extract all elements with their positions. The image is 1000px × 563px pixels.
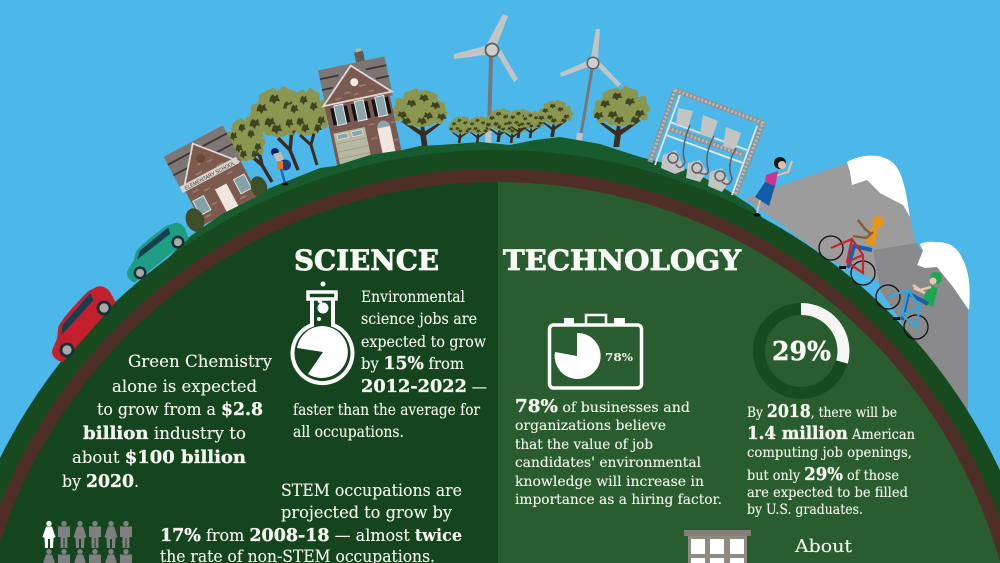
icon: flask with pie bbox=[292, 282, 352, 383]
text: environmental science jobs bbox=[293, 288, 487, 441]
text: green chemistry: Green Chemistry bbox=[128, 352, 273, 371]
text: environmental science jobs: by 15% from bbox=[361, 353, 464, 374]
hydro generators in truss frame bbox=[650, 90, 763, 195]
text: computing job openings: computing job openings, bbox=[747, 445, 912, 461]
tall house with garage bbox=[313, 44, 405, 167]
hill ground bbox=[130, 137, 790, 300]
text: 78% of businesses: that the value of job bbox=[515, 437, 653, 453]
icon grid: one in six people bbox=[42, 521, 132, 563]
bushes bbox=[182, 174, 270, 234]
text: computing job openings: are expected to be filled bbox=[747, 485, 908, 501]
text: 78% of businesses: candidates' environmental bbox=[515, 455, 702, 471]
cyclist: red bike bbox=[819, 216, 884, 285]
text: environmental science jobs: 2012-2022 — bbox=[361, 376, 487, 397]
globe: two-tone interior bbox=[0, 150, 1000, 563]
cyclist: blue bike bbox=[876, 272, 942, 339]
text: STEM occupations: 17% from 2008-18 — almost twice bbox=[160, 525, 462, 546]
text: green chemistry: to grow from a $2.8 bbox=[97, 399, 263, 420]
donut chart: 29% bbox=[759, 309, 843, 393]
heading: science: SCIENCE bbox=[294, 244, 439, 277]
teal car bbox=[118, 217, 193, 286]
heading: technology: TECHNOLOGY bbox=[503, 244, 742, 277]
text: environmental science jobs: science jobs are bbox=[361, 310, 477, 328]
icon: office building bbox=[684, 530, 751, 563]
text: 78% of businesses bbox=[515, 396, 722, 508]
text: 78% of businesses: 78% of businesses and bbox=[515, 396, 690, 417]
woman on hill bbox=[754, 157, 792, 217]
icon: wind turbine left bbox=[454, 14, 518, 147]
text: 78% of businesses: knowledge will increase in bbox=[515, 474, 704, 490]
globe: outer green band bbox=[0, 150, 1000, 563]
globe: brown soil band bbox=[0, 169, 1000, 563]
text: green chemistry: by 2020. bbox=[62, 471, 139, 492]
text: environmental science jobs: all occupations. bbox=[293, 423, 404, 441]
text: green chemistry bbox=[62, 352, 273, 492]
text: computing job openings bbox=[747, 401, 915, 518]
text: green chemistry: billion industry to bbox=[83, 423, 246, 444]
child with backpack bbox=[271, 148, 291, 186]
text: computing job openings: but only 29% of those bbox=[747, 464, 899, 485]
text: STEM occupations: projected to grow by bbox=[281, 503, 453, 522]
text: STEM occupations bbox=[160, 481, 462, 563]
red car bbox=[40, 280, 121, 366]
icon: briefcase with 78% pie bbox=[550, 315, 642, 388]
text: environmental science jobs: faster than the average for bbox=[293, 401, 481, 419]
snowy mountains bbox=[745, 156, 970, 420]
text: STEM occupations: STEM occupations are bbox=[281, 481, 462, 500]
text: environmental science jobs: Environmental bbox=[361, 288, 465, 306]
text: computing job openings: 1.4 million American bbox=[747, 423, 915, 444]
icon: briefcase with 78% pie: 78% bbox=[605, 350, 633, 364]
text: about: About bbox=[794, 536, 853, 557]
text: computing job openings: By 2018, there will be bbox=[747, 401, 897, 422]
text: 78% of businesses: organizations believe bbox=[515, 418, 666, 434]
elementary school building: ELEMENTARY SCHOOL bbox=[184, 160, 236, 192]
donut chart: 29%: 29% bbox=[772, 337, 831, 367]
trees along the hill bbox=[225, 86, 651, 182]
icon: wind turbine right bbox=[560, 29, 621, 147]
text: green chemistry: alone is expected bbox=[112, 377, 257, 396]
text: computing job openings: by U.S. graduates. bbox=[747, 502, 863, 518]
text: green chemistry: about $100 billion bbox=[72, 447, 246, 468]
text: environmental science jobs: expected to grow bbox=[361, 333, 487, 351]
text: 78% of businesses: importance as a hiring factor. bbox=[515, 492, 722, 508]
elementary school building bbox=[164, 125, 260, 227]
